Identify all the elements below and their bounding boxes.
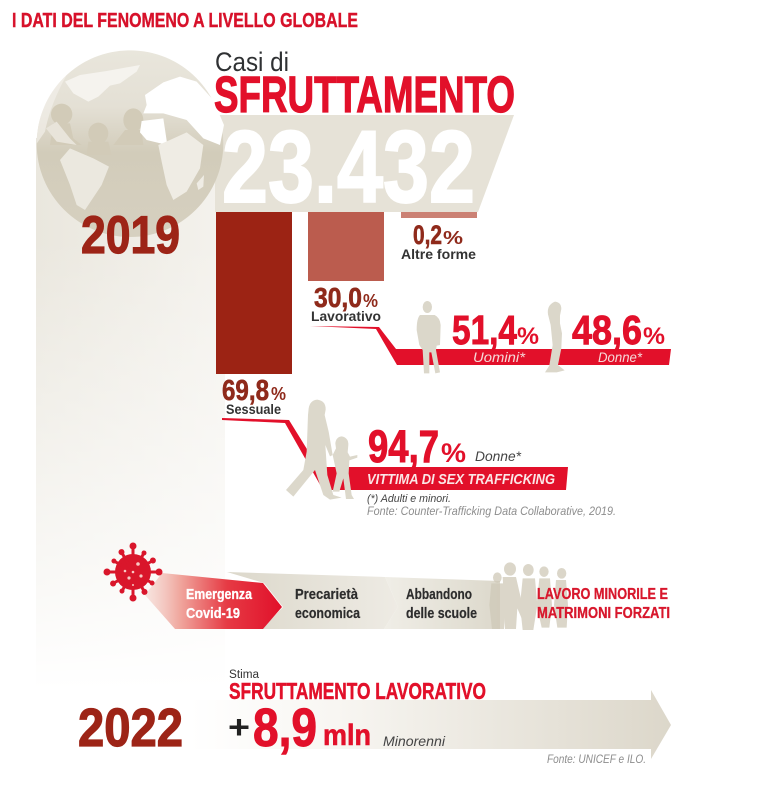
connector band: gender split — [310, 326, 671, 365]
stat: +8,9 mln minorenni: Minorenni — [383, 733, 446, 749]
connector band: sex trafficking — [222, 418, 568, 490]
stat: 48,6% donne — [572, 307, 665, 365]
label: 69,8% sessuale — [222, 375, 286, 417]
source note: Fonte: UNICEF e ILO. — [547, 754, 646, 766]
label: 69,8% sessuale: Sessuale — [226, 401, 281, 417]
label: 30,0% lavorativo: 30,0 — [314, 282, 362, 313]
icon: woman silhouette — [545, 302, 565, 372]
icon: children silhouettes — [489, 562, 568, 630]
stat: 51,4% uomini: 51,4 — [452, 307, 517, 353]
flow arrow band — [145, 572, 500, 629]
bar: sessuale — [216, 212, 292, 374]
flow text: emergenza covid-19: Covid-19 — [186, 605, 240, 622]
label: 30,0% lavorativo: % — [363, 291, 378, 311]
bar: lavorativo — [308, 212, 384, 281]
flow text: lavoro minorile e matrimoni forzati: LAVORO MINORILE E — [537, 586, 668, 603]
stat: 94,7% donne: Donne* — [475, 448, 522, 464]
flow text: abbandono delle scuole: delle scuole — [406, 605, 477, 622]
background strip — [36, 138, 225, 690]
stat: +8,9 mln minorenni: mln — [323, 719, 371, 752]
label: 30,0% lavorativo — [311, 282, 381, 324]
heading: casi di: Casi di — [215, 47, 289, 77]
land masses — [46, 65, 224, 145]
title: I DATI DEL FENOMENO A LIVELLO GLOBALE — [12, 9, 358, 32]
banner background — [215, 115, 514, 212]
year 2019: 2019 — [81, 206, 180, 265]
flow text: lavoro minorile e matrimoni forzati: MATRIMONI FORZATI — [537, 605, 670, 622]
label: 0,2% altre forme: Altre forme — [401, 246, 476, 262]
people silhouettes on globe — [50, 104, 143, 155]
stat: 94,7% donne: % — [441, 438, 466, 468]
footnote: Fonte: Counter-Trafficking Data Collaborative, 2019. — [367, 504, 616, 518]
stat: +8,9 mln minorenni: + — [228, 709, 250, 745]
label: 69,8% sessuale: % — [271, 384, 286, 404]
stat: 48,6% donne: Donne* — [598, 350, 643, 365]
arrow 2022 — [190, 690, 671, 759]
flow text: abbandono delle scuole: Abbandono — [406, 586, 472, 603]
stat: 51,4% uomini: % — [517, 323, 539, 350]
stat: 94,7% donne — [368, 421, 522, 472]
label: stima: Stima — [229, 669, 260, 681]
label: 0,2% altre forme: % — [443, 228, 463, 248]
label: 0,2% altre forme: 0,2 — [413, 220, 442, 250]
year 2022: 2022 — [78, 698, 183, 758]
heading: sfruttamento: SFRUTTAMENTO — [214, 66, 515, 123]
footnote — [367, 493, 616, 518]
flow text: precarieta economica: Precarietà — [295, 586, 359, 603]
heading: sfruttamento lavorativo: SFRUTTAMENTO LAVORATIVO — [229, 678, 486, 704]
stat: 51,4% uomini: Uomini* — [473, 350, 526, 365]
stat: +8,9 mln minorenni — [228, 698, 446, 758]
stat: 94,7% donne: 94,7 — [368, 421, 439, 472]
flow text: emergenza covid-19: Emergenza — [186, 586, 253, 603]
stat: 48,6% donne: 48,6 — [572, 307, 642, 353]
icon: man silhouette — [417, 301, 441, 373]
icon: virus — [104, 542, 162, 602]
label: 0,2% altre forme — [401, 220, 476, 262]
label: 69,8% sessuale: 69,8 — [222, 375, 269, 407]
stat: 48,6% donne: % — [643, 323, 665, 350]
band text: vittima di sex trafficking: VITTIMA DI SEX TRAFFICKING — [367, 471, 555, 488]
icon: globe with people — [37, 50, 224, 237]
stat: +8,9 mln minorenni: 8,9 — [253, 698, 317, 758]
footnote: (*) Adulti e minori. — [367, 493, 451, 505]
bar: altre forme — [401, 212, 477, 218]
icon: woman and child silhouettes — [286, 400, 357, 500]
red chevron: emergenza covid-19 — [145, 573, 282, 629]
label: 30,0% lavorativo: Lavorativo — [311, 308, 381, 324]
total number: 23.432 — [222, 110, 475, 224]
flow text: precarieta economica: economica — [295, 605, 361, 622]
